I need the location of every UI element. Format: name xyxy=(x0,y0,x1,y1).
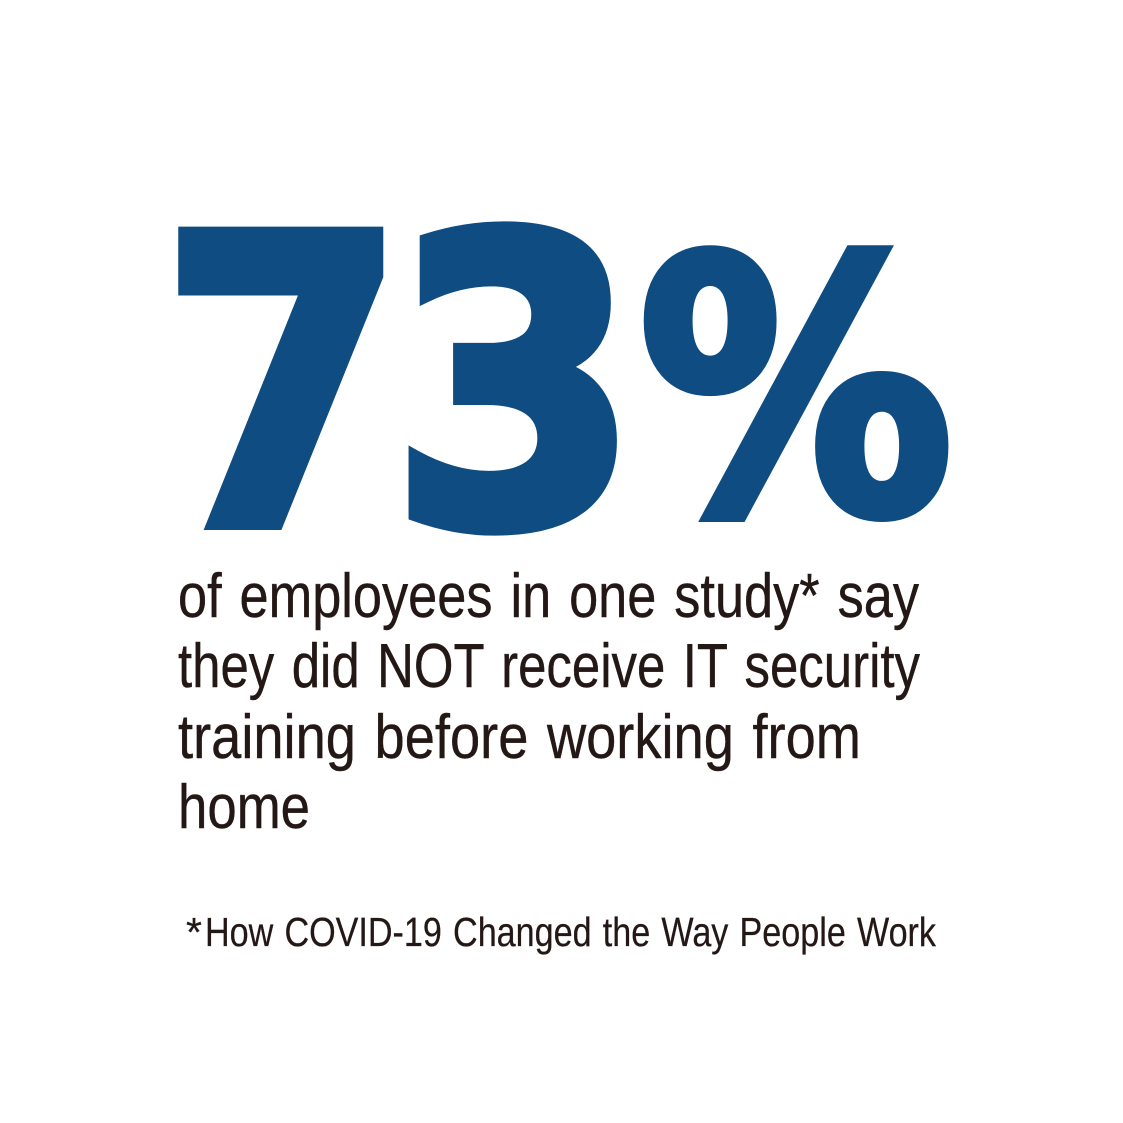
body statement: training before working from xyxy=(178,703,861,772)
body statement: they did NOT receive IT security xyxy=(178,632,920,701)
body statement: home xyxy=(178,773,310,842)
source footnote: * xyxy=(186,909,202,955)
body statement: of employees in one study* say xyxy=(178,562,919,631)
source footnote: How COVID-19 Changed the Way People Work xyxy=(205,909,936,955)
headline statistic: 73%: % xyxy=(639,186,953,594)
headline statistic: 73%: 3 xyxy=(391,154,639,617)
headline statistic: 73%: 7 xyxy=(161,154,405,617)
headline statistic: 73% xyxy=(161,154,953,617)
body statement xyxy=(178,562,920,842)
